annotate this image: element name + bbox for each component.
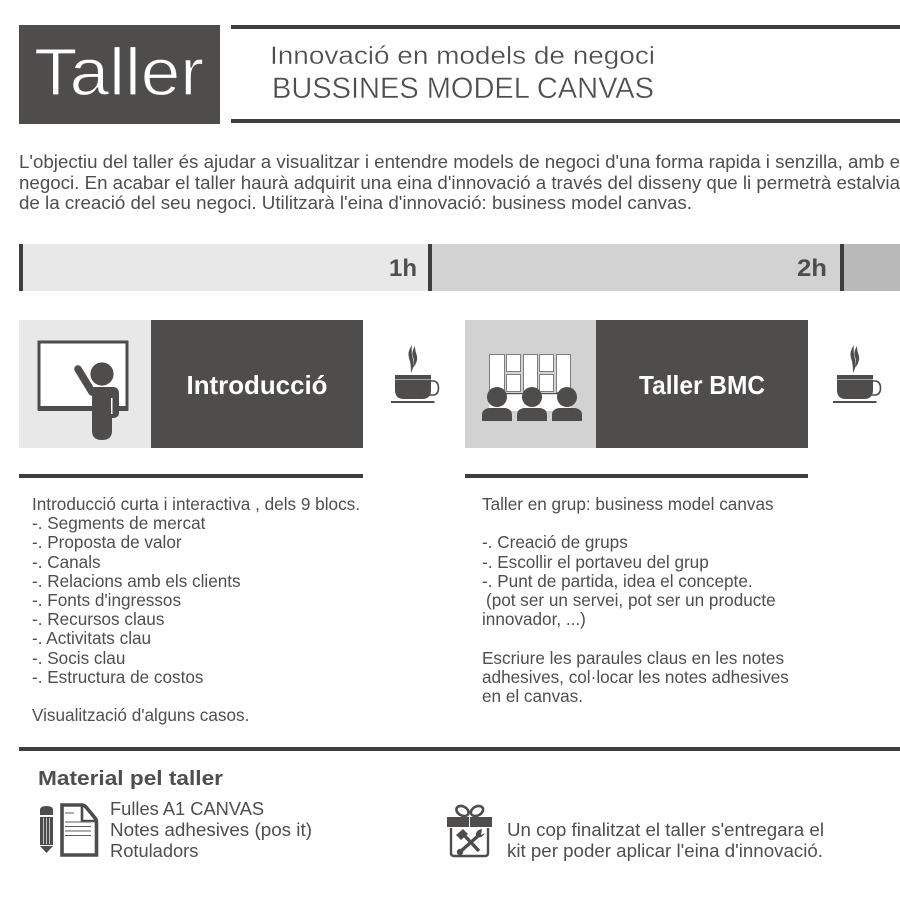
text block: introducció details: Visualització d'alguns casos. (32, 705, 249, 725)
heading: material: Material pel taller (38, 767, 223, 790)
panel: Taller BMC: Taller BMC (639, 370, 765, 400)
timeline bar: 1h (389, 255, 417, 282)
text block: introducció details: Introducció curta i interactiva , dels 9 blocs. (32, 494, 360, 514)
text block: introducció details: -. Fonts d'ingressos (32, 590, 181, 610)
icon detail: crossed tools (456, 829, 485, 855)
column rules (19, 474, 808, 478)
timeline bar (19, 244, 900, 291)
text block: introducció details: -. Segments de mercat (32, 513, 206, 533)
text block: kit note: kit per poder aplicar l'eina d'innovació. (507, 841, 823, 861)
header subtitle band (231, 25, 900, 123)
text block: taller details (482, 494, 789, 706)
text block: kit note: Un cop finalitzat el taller s'entregara el (507, 820, 824, 840)
header subtitle band: Innovació en models de negoci (270, 42, 655, 70)
text block: materials: Fulles A1 CANVAS (110, 798, 264, 819)
icon: pencil (40, 806, 53, 853)
text block: taller details: (pot ser un servei, pot ser un producte (486, 590, 776, 610)
intro paragraph (19, 152, 900, 213)
icon: group at canvas (482, 354, 582, 421)
title block: Taller (19, 25, 220, 124)
text block: introducció details: -. Estructura de costos (32, 667, 203, 687)
text block: introducció details (32, 494, 360, 725)
text block: taller details: innovador, ...) (482, 609, 586, 629)
header subtitle band: BUSSINES MODEL CANVAS (272, 72, 654, 105)
intro paragraph: negoci. En acabar el taller haurà adquirit una eina d'innovació a través del disseny que li permetrà estalvia (19, 173, 900, 193)
text block: introducció details: -. Relacions amb els clients (32, 571, 241, 591)
text block: materials: Rotuladors (110, 840, 198, 861)
text block: taller details: -. Creació de grups (482, 532, 628, 552)
text block: introducció details: -. Activitats clau (32, 628, 151, 648)
panel: Taller BMC (465, 320, 808, 448)
text block: taller details: Taller en grup: business model canvas (482, 494, 774, 514)
text block: taller details: adhesives, col·locar les notes adhesives (482, 667, 789, 687)
text block: kit note (507, 820, 824, 861)
text block: introducció details: -. Recursos claus (32, 609, 164, 629)
text block: taller details: en el canvas. (482, 686, 583, 706)
icon: coffee cup 2 (833, 345, 880, 403)
intro paragraph: de la creació del seu negoci. Utilitzarà l'eina d'innovació: business model canvas. (19, 193, 692, 213)
panel: Introducció: Introducció (186, 370, 328, 400)
intro paragraph: L'objectiu del taller és ajudar a visualitzar i entendre models de negoci d'una forma rapida i senzilla, amb e (19, 152, 900, 172)
text block: introducció details: -. Proposta de valor (32, 532, 182, 552)
text block: introducció details: -. Canals (32, 552, 101, 572)
text block: materials: Notes adhesives (pos it) (110, 819, 312, 840)
icon: gift with tools (447, 804, 492, 856)
icon: coffee cup 1 (391, 345, 438, 403)
text block: materials (110, 798, 312, 861)
title block: Taller: Taller (34, 35, 204, 110)
icon: document (62, 805, 96, 855)
divider (19, 747, 900, 751)
panel: Introducció (19, 320, 363, 448)
text block: taller details: -. Escollir el portaveu del grup (482, 552, 709, 572)
text block: taller details: Escriure les paraules claus en les notes (482, 648, 784, 668)
text block: taller details: -. Punt de partida, idea el concepte. (482, 571, 753, 591)
timeline bar: 2h (797, 255, 827, 282)
icon: teacher at board (38, 342, 128, 440)
text block: introducció details: -. Socis clau (32, 648, 125, 668)
